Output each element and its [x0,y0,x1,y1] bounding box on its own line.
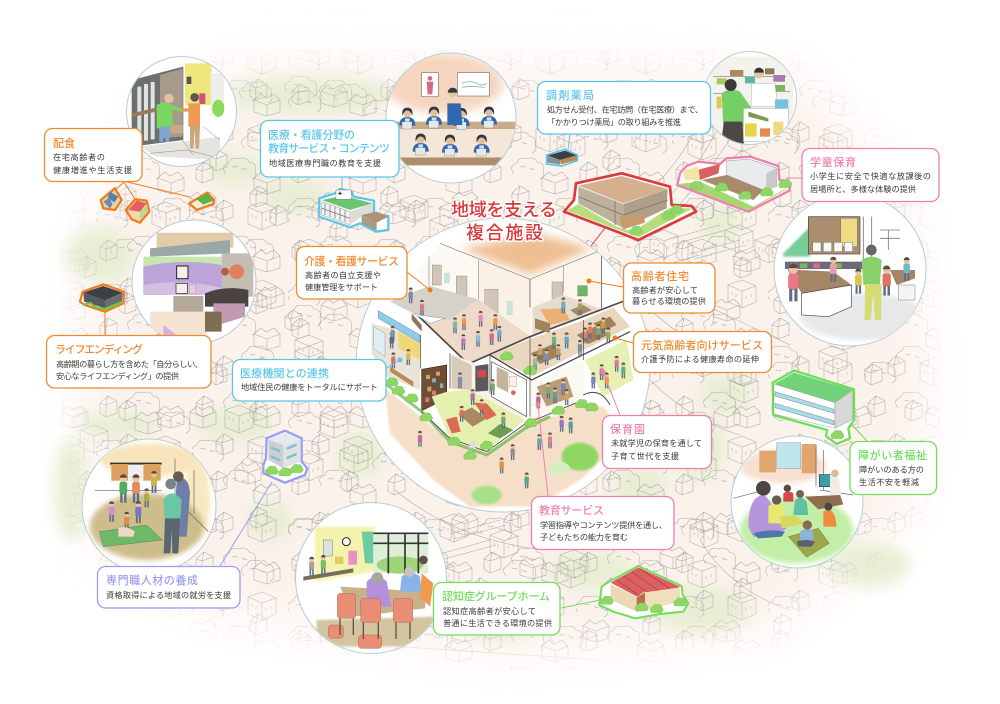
panel: main facility circle [356,218,650,512]
body [540,520,667,542]
body [305,270,381,292]
body: 「かかりつけ薬局」の取り組みを推進 [547,117,681,127]
icon: after-school school building [677,157,792,212]
courtyard [432,390,525,450]
back wall right [530,250,602,337]
heading [268,128,390,155]
upper floor slabs [390,286,478,320]
furniture courtyard [458,407,487,427]
icon: hospital building [319,189,388,232]
callout: ライフエンディング [46,336,211,388]
body [859,464,924,487]
body [810,171,931,194]
body [443,606,552,628]
callout: 医療・看護分野の教育サービス・コンテンツ [260,120,399,177]
beds [540,308,570,325]
scene: training circle [82,439,216,573]
map line drawing of houses and trees [60,50,940,670]
body: 子どもたちの能力を育む [540,532,628,542]
scene: dementia group home circle [296,502,446,654]
heading: 教育サービス・コンテンツ [268,141,390,155]
title: 地域を支える [451,200,557,220]
map wash [54,65,930,655]
icon: group home building [599,566,688,618]
callout: 専門職人材の養成 [98,566,240,608]
body: 暮らせる環境の提供 [632,296,706,306]
heading: 学童保育 [810,155,856,169]
callout: 介護・看護サービス [296,246,407,299]
heading: 教育サービス [539,503,604,517]
body: 健康管理をサポート [305,282,378,292]
heading: 元気高齢者向けサービス [641,338,763,352]
body: 資格取得による地域の就労を支援 [106,590,231,600]
body: 生活不安を軽減 [859,477,919,487]
callout: 元気高齢者向けサービス [634,332,772,372]
body: 学習指導やコンテンツ提供を通し、 [540,520,667,530]
body: 地域医療専門職の教育を支援 [269,158,381,168]
scene: life ending circle [132,220,256,344]
scene: pharmacy circle [704,52,796,145]
icon: training building [263,431,307,483]
heading: 保育園 [610,422,645,436]
body: 高齢者が安心して [632,285,698,295]
icon: disability welfare building [773,371,854,444]
scene: disability welfare circle [731,436,863,568]
body: 健康増進や生活支援 [53,165,132,175]
heading: 配食 [53,136,75,150]
body: 小学生に安全で快適な放課後の [810,171,931,181]
callout: 配食 [44,128,142,182]
body: 介護予防による健康寿命の延伸 [641,354,759,364]
map: watercolour town background [54,50,940,670]
body [547,104,703,127]
heading: 医療・看護分野の [268,128,355,142]
body: 子育て世代を支援 [611,451,679,461]
back wall left [417,244,504,299]
body [53,152,132,175]
callout: 高齢者住宅 [624,263,715,313]
callout: 調剤薬局 [538,82,710,134]
body: 居場所と、多様な体験の提供 [810,184,916,194]
body [611,438,702,461]
callout: 教育サービス [532,496,674,550]
icon: life ending building [80,284,124,312]
heading: 高齢者住宅 [631,269,689,283]
body: 障がいのある方の [859,464,924,474]
body: 普通に生活できる環境の提供 [443,618,552,628]
body: 処方せん受付、在宅訪問（在宅医療）まで、 [547,104,703,114]
icon: main facility building [564,173,696,240]
heading: 介護・看護サービス [304,254,399,268]
body: 高齢期の暮らし方を含めた「自分らしい、 [56,359,203,369]
heading: 認知症グループホーム [442,589,550,603]
ground floor rooms [530,360,583,417]
body: 安心なライフエンディング」の提供 [56,371,179,381]
body: 高齢者の自立支援や [305,270,381,280]
heading: 医療機関との連携 [240,366,329,380]
callout: 認知症グループホーム [434,582,560,635]
callout: 保育園 [602,416,712,468]
body: 在宅高齢者の [53,152,105,162]
heading: 専門職人材の養成 [106,573,198,587]
people [389,288,625,488]
title: 複合施設 [466,223,543,243]
dining floor [490,307,630,377]
body: 未就学児の保育を通して [611,438,702,448]
scene: after-school circle [774,194,927,346]
heading: 調剤薬局 [546,89,594,102]
title [451,200,557,243]
leader lines [105,134,867,608]
callout: 障がい者福祉 [850,442,936,494]
scene: education circle [383,53,523,183]
bookshelf [422,365,447,411]
callout: 医療機関との連携 [232,360,386,401]
ground path [385,388,627,507]
roof wash [460,233,593,275]
heading: 障がい者福祉 [858,448,927,462]
scene: delivery circle [126,56,236,166]
icon: pharmacy building [547,149,577,166]
body [632,285,706,306]
body [56,359,203,381]
trees and bushes [385,352,598,459]
callout: 学童保育 [802,148,939,202]
body: 地域住民の健康をトータルにサポート [241,382,378,392]
heading: ライフエンディング [55,342,143,356]
clinic [372,323,420,390]
body: 認知症高齢者が安心して [443,606,536,616]
icon: 配食 houses [101,188,214,223]
